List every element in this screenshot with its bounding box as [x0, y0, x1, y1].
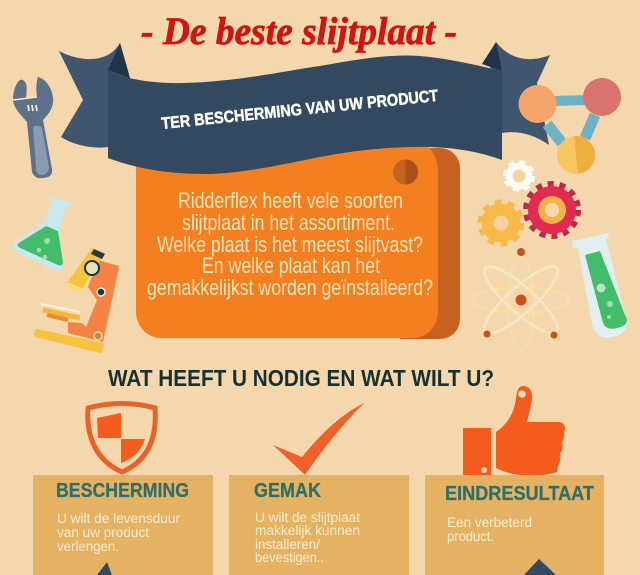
bescherming text: verlengen.	[57, 539, 119, 554]
ribbon tip	[97, 562, 112, 575]
ribbon body	[108, 55, 502, 174]
icon: atom	[473, 248, 569, 350]
bescherming text: van uw product	[57, 525, 149, 540]
intro text: Welke plaat is het meest slijtvast?	[157, 232, 423, 257]
banner ribbon	[59, 42, 550, 174]
intro text: En welke plaat kan het	[202, 253, 380, 278]
intro text: gemakkelijkst worden geïnstalleerd?	[147, 275, 433, 300]
panel: orange intro card	[136, 140, 460, 339]
icon: checkmark	[273, 403, 364, 475]
gemak text: U wilt de slijtplaat	[255, 510, 360, 525]
intro text: Ridderflex heeft vele soorten	[178, 188, 403, 213]
icon: shield	[88, 404, 155, 472]
gemak text: makkelijk kunnen	[255, 523, 360, 538]
ribbon left tail	[59, 43, 130, 148]
eindresultaat text	[447, 515, 532, 544]
panel: eindresultaat	[425, 475, 604, 575]
panel: bescherming	[33, 475, 213, 575]
eindresultaat heading: EINDRESULTAAT	[445, 483, 594, 505]
icon: wrench	[13, 77, 53, 178]
eindresultaat text: product.	[447, 529, 494, 544]
gemak text	[255, 510, 360, 565]
eindresultaat text: Een verbeterd	[447, 515, 532, 530]
icon: card hole	[393, 160, 418, 184]
icon: flask	[13, 196, 72, 272]
bescherming text: U wilt de levensduur	[57, 511, 181, 526]
icon: thumbs up	[463, 386, 565, 476]
heading: WAT HEEFT U NODIG EN WAT WILT U?	[108, 365, 494, 391]
gemak heading: GEMAK	[254, 480, 321, 502]
icon: test tube	[572, 233, 627, 337]
gemak text: bevestigen..	[255, 550, 324, 565]
bescherming heading: BESCHERMING	[56, 480, 189, 502]
ribbon tip	[524, 559, 556, 575]
gemak text: installeren/	[255, 537, 320, 552]
ribbon right tail	[490, 42, 550, 145]
intro text	[147, 188, 433, 300]
bescherming text	[57, 511, 181, 554]
title: - De beste slijtplaat -	[141, 10, 457, 53]
intro text: slijtplaat in het assortiment.	[182, 210, 395, 235]
icon: molecule	[518, 78, 621, 174]
icon: red gear	[526, 184, 578, 236]
icon: yellow gear	[480, 202, 522, 244]
panel: gemak	[229, 475, 409, 575]
icon: microscope	[36, 248, 119, 351]
ribbon text: TER BESCHERMING VAN UW PRODUCT	[161, 87, 439, 133]
icon: white gear	[505, 162, 533, 190]
